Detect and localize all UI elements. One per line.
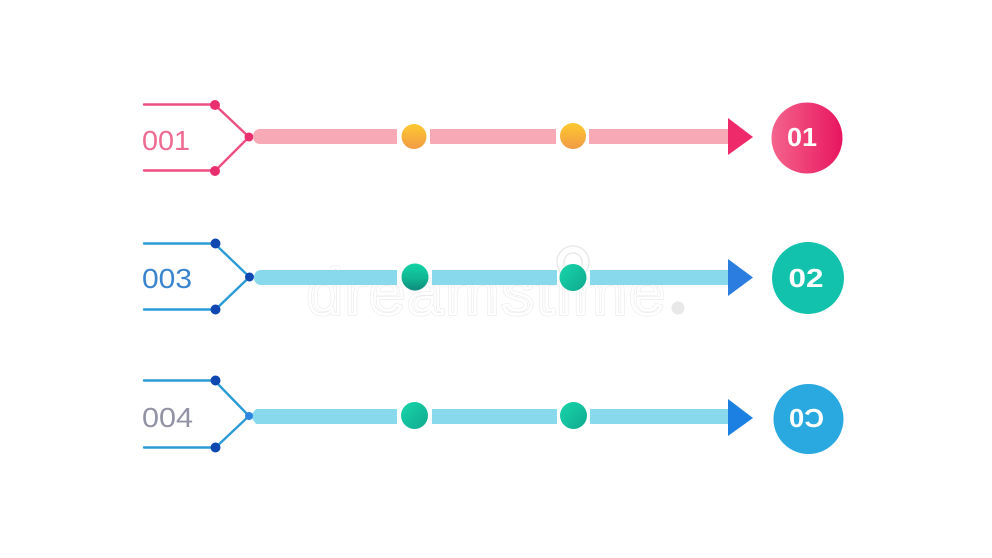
label: 001: 001: [142, 125, 190, 156]
node: teal dot row 2 second: [560, 264, 586, 291]
badge: 02: [772, 242, 844, 314]
arrowhead: blue lower: [728, 399, 753, 436]
connector: pink fork: [144, 100, 254, 176]
node: orange dot 2: [560, 123, 586, 149]
node: teal dot row 3 first: [401, 402, 428, 429]
node: teal dot row 3 second: [560, 402, 587, 429]
connector: blue fork: [144, 238, 254, 314]
node: orange dot 1: [402, 124, 426, 149]
arrow shaft: light blue lower: [250, 409, 729, 424]
arrowhead: pink: [728, 118, 753, 155]
row 3: blue arrow with cyan badge: [142, 376, 844, 454]
row 2: blue arrow with teal badge: [142, 238, 844, 314]
node: teal dot row 2 first: [402, 264, 428, 290]
badge: mirrored 0C: [774, 384, 844, 454]
arrowhead: blue: [728, 259, 753, 296]
arrow shaft: pink: [253, 129, 729, 144]
label: 004: 004: [142, 402, 193, 433]
badge: mirrored 0C: 0Ɔ: [789, 403, 824, 433]
badge: 01: 01: [787, 122, 817, 152]
label: 003: 003: [142, 263, 192, 294]
watermark: dreamstime: dreamstime: [307, 256, 665, 328]
node: blue junction row 3: [245, 412, 253, 420]
row 1: pink arrow: [142, 100, 842, 176]
badge: 01: [772, 102, 842, 174]
watermark: dreamstime: dreamstime: [307, 256, 665, 328]
badge: 02: 02: [788, 263, 824, 293]
connector: blue fork lower: [144, 376, 249, 452]
arrow shaft: light blue: [254, 270, 729, 285]
